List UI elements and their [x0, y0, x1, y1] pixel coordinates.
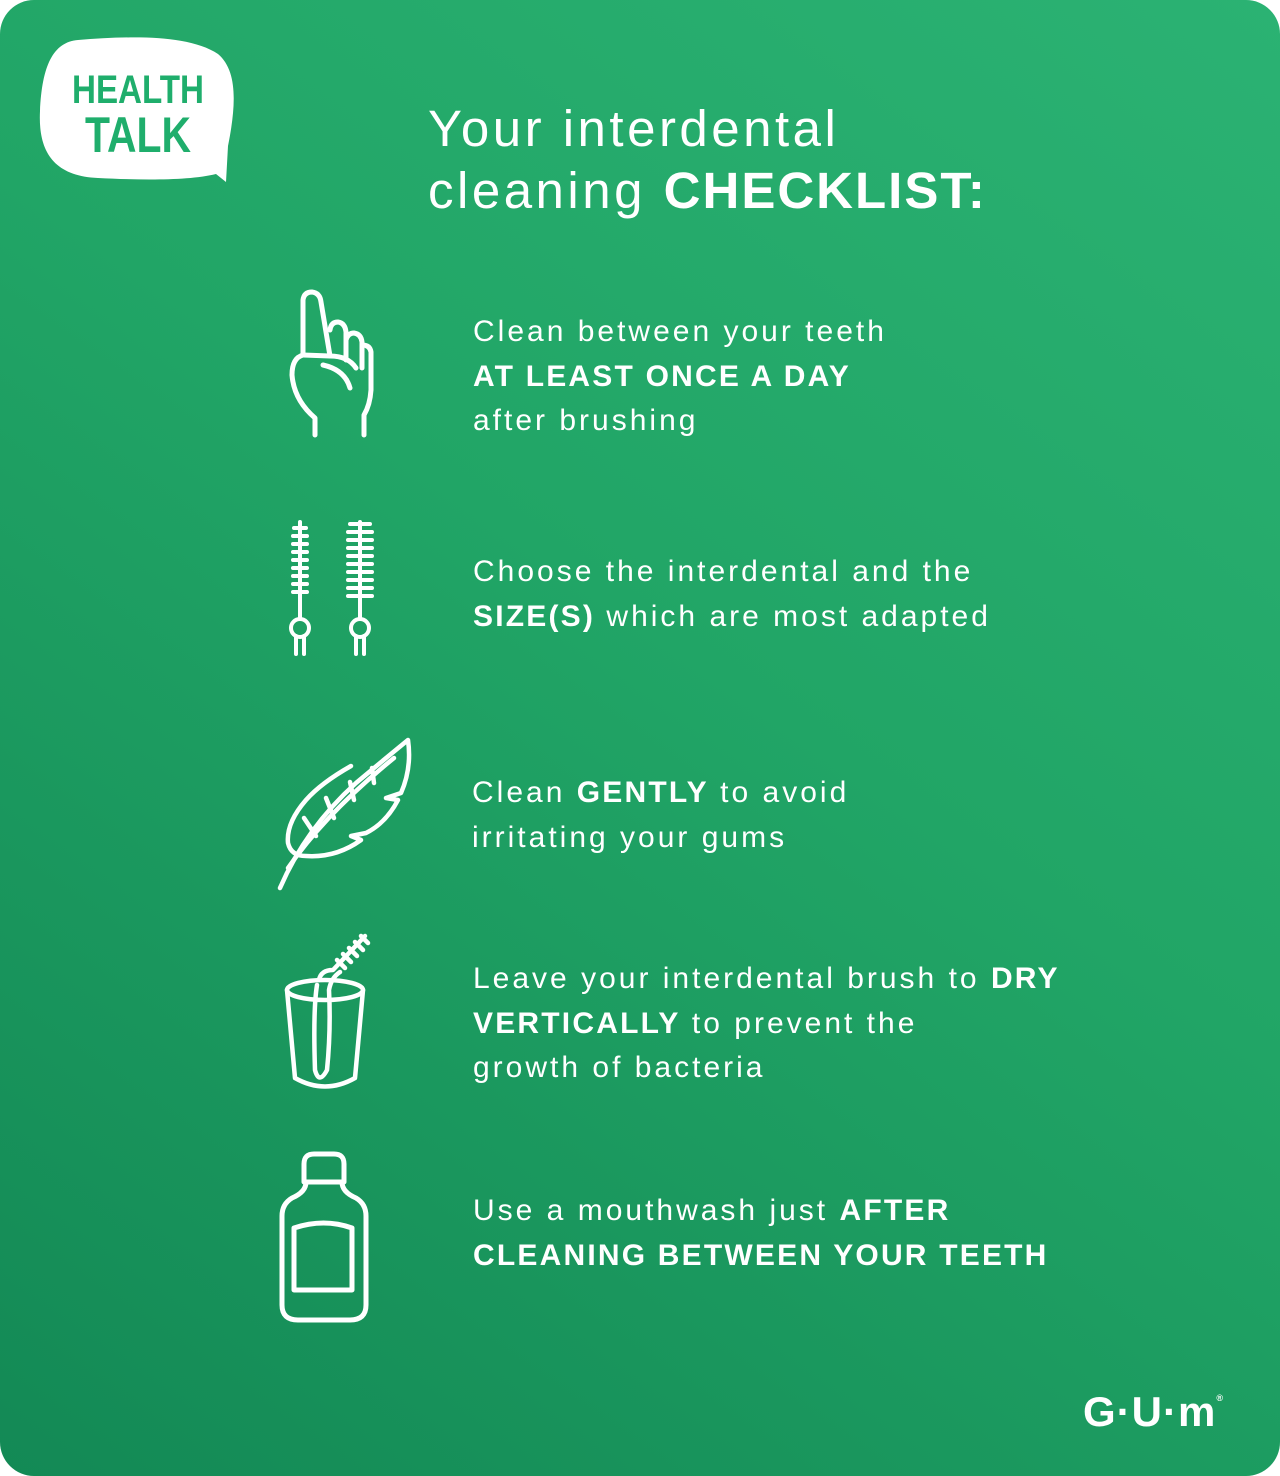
text: item 3: Clean GENTLY to avoid: [472, 776, 849, 809]
text: item 4: [473, 962, 1060, 1084]
title: [428, 100, 987, 219]
text: item 2: SIZE(S) which are most adapted: [473, 600, 991, 632]
text: item 3: irritating your gums: [472, 820, 787, 854]
text: item 5: CLEANING BETWEEN YOUR TEETH: [473, 1238, 1049, 1272]
logo: health talk bubble: HEALTH: [72, 68, 204, 112]
text: item 4: VERTICALLY to prevent the: [473, 1006, 917, 1040]
icon: glass with brush: [284, 934, 370, 1089]
text: item 1: AT LEAST ONCE A DAY: [473, 360, 851, 392]
text: item 5: [473, 1194, 1049, 1272]
text: item 1: [473, 315, 887, 437]
text: item 4: growth of bacteria: [473, 1051, 765, 1084]
text: item 3: [472, 776, 849, 854]
title: Your interdental: [428, 100, 839, 157]
icon: feather: [278, 738, 412, 890]
logo: GUM: G·U·m®: [1083, 1388, 1224, 1435]
logo: health talk bubble: [40, 37, 234, 182]
text: item 2: Choose the interdental and the: [473, 555, 973, 588]
text: item 1: after brushing: [473, 404, 698, 437]
text: item 1: Clean between your teeth: [473, 315, 887, 348]
text: item 2: [473, 555, 991, 632]
logo: health talk bubble: TALK: [85, 107, 191, 163]
icon: mouthwash bottle: [280, 1152, 368, 1322]
icon: hand: [290, 290, 374, 438]
text: item 4: Leave your interdental brush to DRY: [473, 962, 1060, 995]
title: cleaning CHECKLIST:: [428, 162, 987, 219]
text: item 5: Use a mouthwash just AFTER: [473, 1194, 950, 1227]
icon: interdental brushes: [289, 520, 374, 656]
